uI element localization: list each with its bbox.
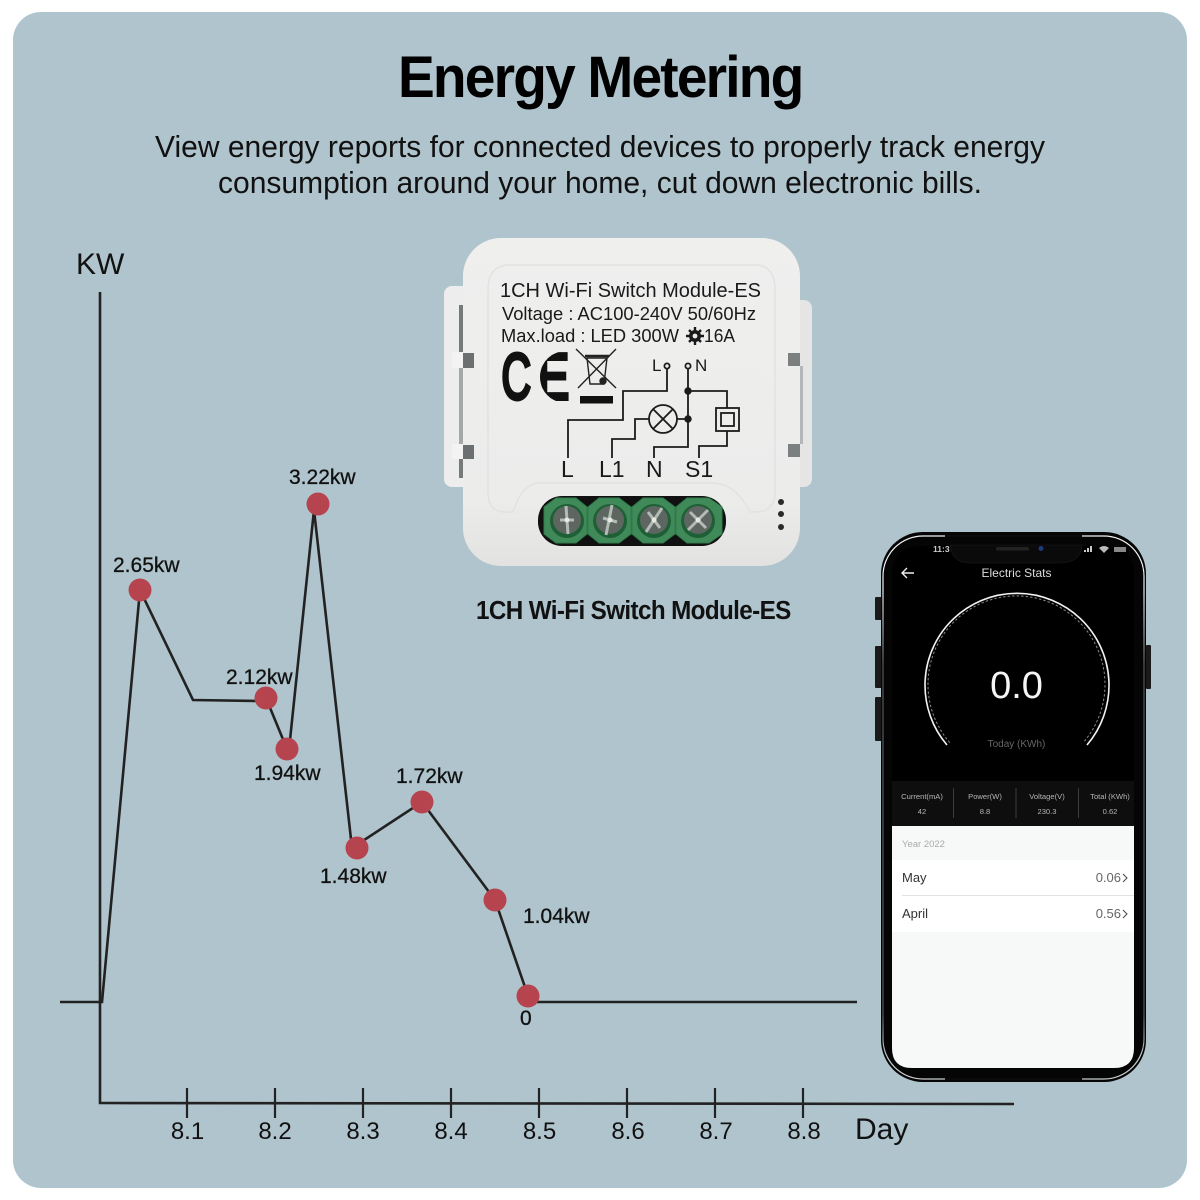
monthly report list (892, 826, 1134, 1068)
x axis tick labels: 8.1 (171, 1118, 204, 1145)
app title: Electric Stats (981, 566, 1052, 580)
CE mark: C (502, 342, 531, 413)
monthly report list: 0.56 (1096, 906, 1121, 921)
device side tabs (444, 286, 812, 487)
device specification text: 16A (704, 325, 736, 346)
data point labels: 2.12kw (226, 666, 293, 689)
gauge caption: Today (KWh) (988, 739, 1045, 750)
wiring labels: L1 (599, 456, 625, 482)
data point labels: 1.48kw (320, 865, 387, 888)
indicator dots (778, 499, 784, 530)
axes (100, 292, 1014, 1104)
wiring labels (561, 356, 713, 482)
line chart (60, 248, 1014, 1146)
y axis label: KW (76, 248, 125, 281)
x axis tick labels: 8.2 (258, 1118, 292, 1145)
CE mark (502, 352, 569, 402)
stats band: 42 (918, 807, 926, 816)
wiring labels: L (652, 356, 661, 375)
data point labels: 1.04kw (523, 905, 590, 928)
wiring labels: S1 (685, 456, 713, 482)
gauge (925, 593, 1109, 745)
wiring labels: N (695, 356, 707, 375)
status bar (933, 544, 1126, 554)
subtitle (155, 129, 1045, 200)
phone frame (881, 532, 1146, 1082)
wiring diagram (568, 363, 739, 458)
monthly report list: May (902, 870, 927, 885)
device specification text (500, 279, 761, 346)
device specification text: Max.load : LED 300W (501, 325, 680, 346)
monthly report list: April (902, 906, 928, 921)
data point labels: 3.22kw (289, 466, 356, 489)
phone camera dot (996, 546, 1044, 551)
data point labels: 2.65kw (113, 554, 180, 577)
monthly report list: 0.06 (1096, 870, 1121, 885)
icon: gear (686, 327, 704, 345)
stats band: 0.62 (1103, 807, 1117, 816)
device caption: 1CH Wi-Fi Switch Module-ES (476, 596, 791, 625)
x axis tick labels (171, 1118, 821, 1145)
CE mark: E (538, 342, 569, 414)
switch module device (444, 238, 812, 566)
wiring labels: N (646, 456, 663, 482)
x axis tick labels: 8.5 (523, 1118, 556, 1145)
stats band: Total (KWh) (1090, 792, 1130, 801)
title: Energy Metering (398, 45, 802, 109)
data point labels: 0 (520, 1007, 532, 1030)
stats band: 230.3 (1037, 807, 1057, 816)
smartphone (875, 532, 1151, 1082)
x axis ticks (187, 1088, 803, 1118)
x axis tick labels: 8.4 (434, 1118, 468, 1145)
back arrow (902, 568, 914, 578)
stats band: Current(mA) (901, 792, 943, 801)
x axis tick labels: 8.7 (699, 1118, 733, 1145)
phone screen dark area (892, 546, 1134, 826)
device body (463, 238, 800, 566)
device specification text: Voltage : AC100-240V 50/60Hz (502, 303, 756, 324)
subtitle: View energy reports for connected devices to properly track energy (155, 129, 1045, 164)
wiring labels: L (561, 456, 574, 482)
device side clips (452, 305, 803, 478)
device specification text: 1CH Wi-Fi Switch Module-ES (500, 279, 761, 302)
stats band (892, 781, 1134, 826)
gauge value: 0.0 (990, 665, 1043, 707)
terminal block (538, 496, 726, 546)
icon: crossed-out bin (576, 349, 616, 404)
energy data line (60, 510, 857, 1002)
stats band: 8.8 (980, 807, 990, 816)
x axis label: Day (855, 1113, 908, 1146)
data point labels: 1.72kw (396, 765, 463, 788)
phone notch (950, 545, 1082, 563)
subtitle: consumption around your home, cut down electronic bills. (218, 165, 982, 200)
x axis tick labels: 8.3 (346, 1118, 380, 1145)
stats band: Voltage(V) (1029, 792, 1065, 801)
data point labels: 1.94kw (254, 762, 321, 785)
x axis tick labels: 8.8 (787, 1118, 821, 1145)
monthly report list: Year 2022 (902, 839, 945, 850)
stats band: Power(W) (968, 792, 1002, 801)
data points (128, 492, 540, 1008)
phone side buttons (875, 597, 1151, 741)
x axis tick labels: 8.6 (611, 1118, 645, 1145)
data point labels (113, 466, 590, 1030)
device inset outline (488, 265, 775, 512)
status bar: 11:3 (933, 544, 950, 554)
